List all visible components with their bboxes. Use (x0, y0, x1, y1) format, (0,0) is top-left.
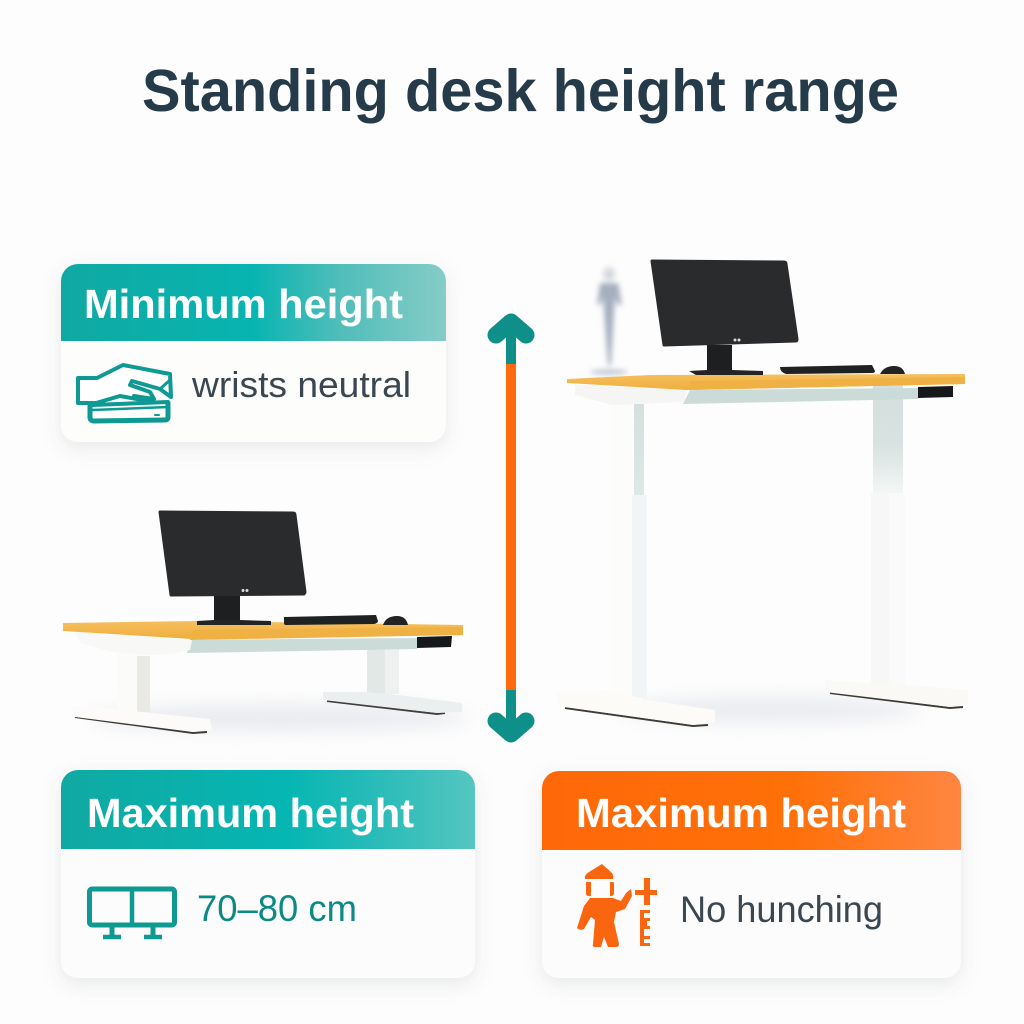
desk frame tall (575, 385, 953, 405)
panel: minimum height (61, 264, 446, 442)
label: no hunching: No hunching (680, 889, 883, 930)
ghost figure (590, 267, 628, 374)
desk frame low (75, 632, 452, 655)
header: maximum height teal (61, 770, 475, 849)
label: 70–80 cm: 70–80 cm (197, 888, 357, 929)
keyboard tall (780, 365, 875, 374)
monitor low (160, 512, 305, 625)
monitor tall (652, 261, 797, 375)
keyboard low (284, 615, 378, 625)
header: maximum height orange: Maximum height (576, 790, 906, 836)
label: wrists neutral: wrists neutral (191, 364, 411, 405)
mouse tall (880, 366, 905, 374)
header: maximum height orange (542, 771, 961, 850)
desk legs low (70, 648, 462, 733)
title: Standing desk height range (142, 58, 899, 124)
panel: maximum height teal (61, 770, 475, 978)
mouse low (383, 616, 408, 625)
panel: maximum height orange (542, 771, 961, 978)
header: minimum height (61, 264, 446, 341)
arrow: height range (496, 322, 526, 734)
desk legs tall (557, 385, 968, 726)
header: minimum height: Minimum height (84, 281, 403, 327)
icon: person with ruler (577, 864, 657, 947)
illustration: tall desk (557, 261, 968, 726)
icon: dual monitors (90, 888, 174, 937)
illustration: low desk (63, 512, 470, 733)
desktop tall (567, 374, 965, 390)
header: maximum height teal: Maximum height (87, 790, 414, 836)
desktop low (63, 621, 463, 640)
icon: hand on keyboard (78, 365, 171, 421)
